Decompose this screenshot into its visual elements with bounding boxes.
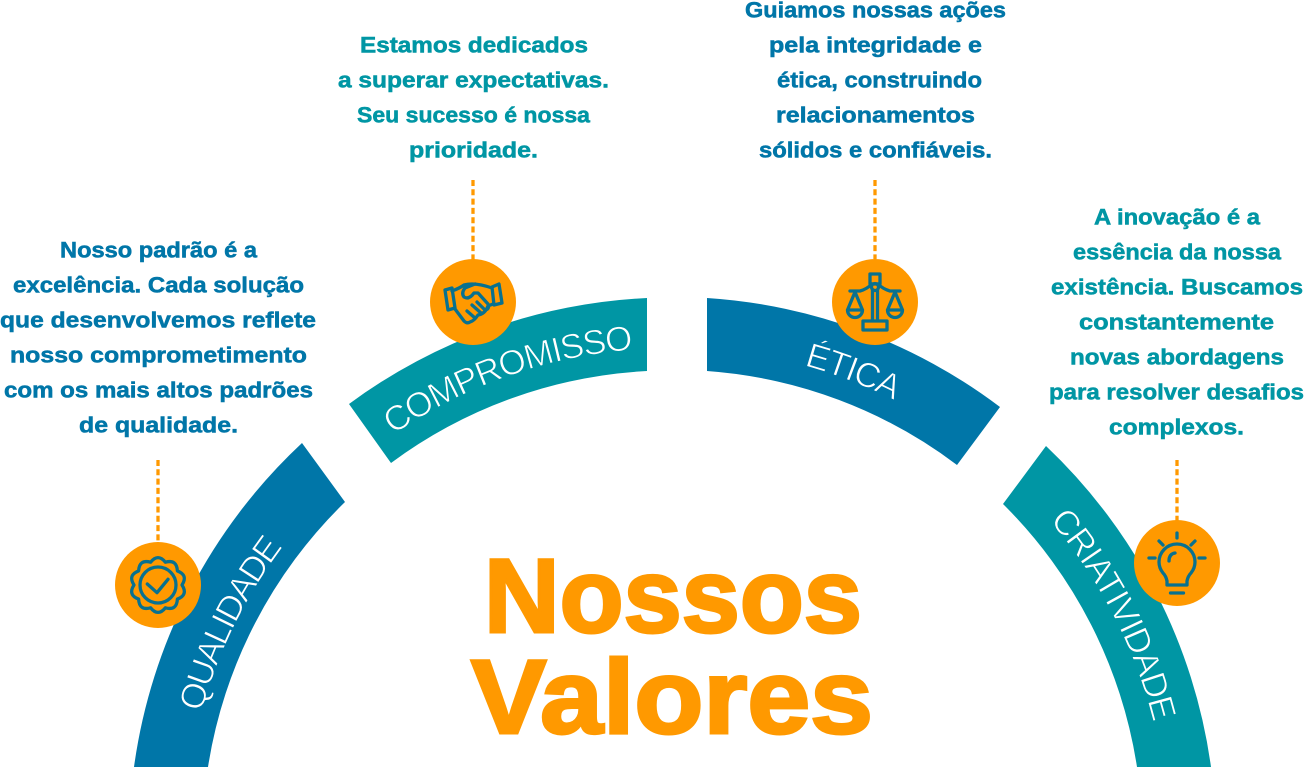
icon: scales	[832, 259, 918, 345]
icon: handshake	[430, 259, 516, 345]
connector: compromisso	[471, 180, 475, 260]
text: qualidade description: excelência. Cada solução	[13, 273, 304, 298]
text: compromisso description: Seu sucesso é nossa	[357, 103, 590, 128]
text: criatividade description: existência. Buscamos	[1051, 275, 1303, 300]
label: criatividade: CRIATIVIDADE	[1055, 511, 1176, 720]
text: criatividade description: constantemente	[1079, 310, 1274, 335]
text: qualidade description: nosso comprometimento	[10, 343, 307, 368]
arc segment: criatividade	[1003, 446, 1211, 767]
text: compromisso description	[338, 33, 609, 163]
text: qualidade description: de qualidade.	[79, 413, 238, 438]
text: etica description	[745, 0, 1006, 163]
icon: light bulb	[1134, 520, 1220, 606]
title	[471, 538, 873, 756]
panel: criatividade	[1003, 205, 1304, 767]
text: compromisso description: prioridade.	[409, 138, 538, 163]
text: qualidade description: com os mais altos padrões	[4, 378, 313, 403]
text: etica description: sólidos e confiáveis.	[759, 138, 992, 163]
arc segment: compromisso	[349, 298, 647, 463]
icon: quality badge	[115, 542, 201, 628]
text: criatividade description: A inovação é a	[1094, 205, 1261, 230]
text: criatividade description: essência da nossa	[1073, 240, 1281, 265]
text: etica description: pela integridade e	[769, 33, 982, 58]
connector: criatividade	[1175, 460, 1179, 521]
label: qualidade: QUALIDADE	[182, 534, 282, 708]
connector: qualidade	[156, 460, 160, 543]
text: etica description: relacionamentos	[776, 103, 975, 128]
text: criatividade description: para resolver desafios	[1049, 380, 1304, 405]
text: compromisso description: Estamos dedicados	[360, 33, 588, 58]
text: qualidade description: que desenvolvemos reflete	[0, 308, 316, 333]
text: etica description: ética, construindo	[777, 68, 982, 93]
text: criatividade description: novas abordagens	[1070, 345, 1284, 370]
panel: etica	[707, 0, 1006, 465]
title: Valores	[471, 639, 873, 756]
text: criatividade description: complexos.	[1109, 415, 1244, 440]
panel: qualidade	[0, 238, 345, 767]
label: compromisso: COMPROMISSO	[386, 326, 630, 430]
panel: compromisso	[338, 33, 647, 463]
text: criatividade description	[1049, 205, 1304, 440]
arc segment: etica	[707, 298, 1000, 465]
text: qualidade description: Nosso padrão é a	[60, 238, 258, 263]
connector: etica	[873, 180, 877, 259]
text: qualidade description	[0, 238, 316, 438]
arc segment: qualidade	[134, 443, 345, 767]
label: etica: ÉTICA	[807, 340, 896, 400]
text: compromisso description: a superar expectativas.	[338, 68, 609, 93]
title: Nossos	[484, 538, 862, 655]
